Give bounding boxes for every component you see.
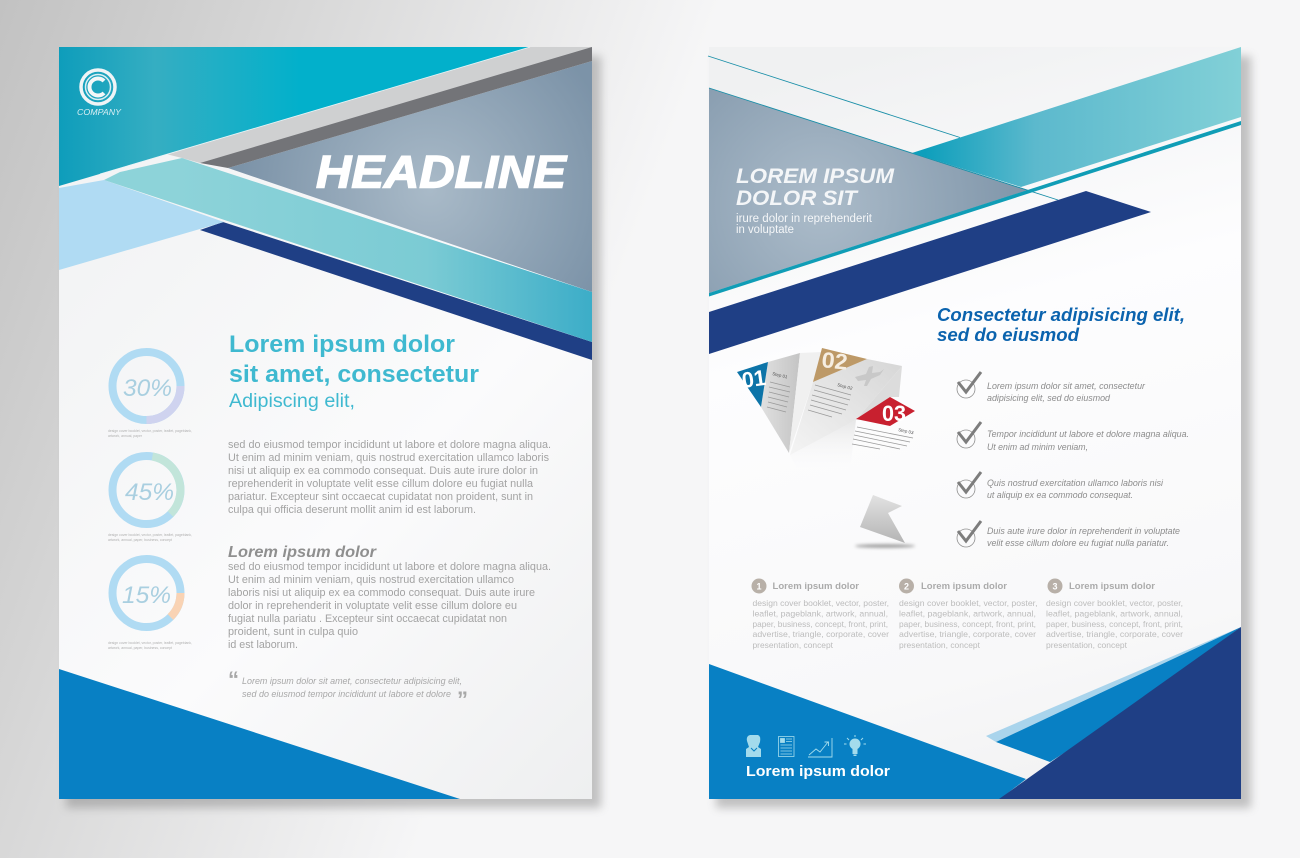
column 3: paper, business, concept, front, print,	[1046, 619, 1183, 629]
heading: lorem ipsum dolor sit: in voluptate	[736, 224, 794, 236]
heading: lorem ipsum dolor	[229, 331, 479, 412]
header shapes	[709, 47, 1241, 354]
step labels	[772, 371, 914, 435]
tail fold	[860, 495, 905, 543]
donut caption 2: design cover booklet, vector, poster, leaflet, pageblank,	[108, 532, 192, 537]
step labels: Step 01	[772, 371, 788, 380]
subheading: Lorem ipsum dolor	[228, 544, 377, 561]
donut caption 3: design cover booklet, vector, poster, leaflet, pageblank,	[108, 640, 192, 645]
footer shapes	[709, 627, 1241, 799]
heading: lorem ipsum dolor: sit amet, consectetur	[229, 361, 479, 388]
tag 02: 02	[820, 347, 849, 375]
quote: sed do eiusmod tempor incididunt ut labore et dolore	[242, 689, 451, 699]
body text 2: laboris nisi ut aliquip ex ea commodo consequat. Duis aute irure	[228, 587, 535, 599]
item 2	[957, 422, 1189, 452]
donut 45%	[112, 456, 180, 524]
panel: left page	[59, 47, 601, 808]
icon: person	[746, 735, 761, 757]
floor shadow	[855, 544, 915, 548]
tag 03: 03	[882, 401, 906, 426]
column 1: leaflet, pageblank, artwork, annual,	[752, 608, 888, 618]
icon: light bulb	[844, 735, 866, 756]
column 2	[899, 578, 1038, 650]
column 1: Lorem ipsum dolor	[772, 580, 859, 591]
column 2: presentation, concept	[899, 640, 981, 650]
tag 01: 01	[740, 365, 767, 393]
headline: HEADLINE	[316, 146, 568, 198]
quote: ”	[457, 687, 468, 712]
item 3: Quis nostrud exercitation ullamco laboris nisi	[987, 478, 1164, 488]
column 3: 3	[1052, 582, 1058, 592]
body text 2: sed do eiusmod tempor incididunt ut labore et dolore magna aliqua.	[228, 561, 551, 573]
step text lines	[767, 382, 913, 449]
tag 03	[856, 397, 915, 426]
icon: document	[778, 736, 794, 756]
item 1: Lorem ipsum dolor sit amet, consectetur	[987, 381, 1146, 391]
body text 1: reprehenderit in voluptate velit esse cillum dolore eu fugiat nulla	[228, 478, 533, 490]
tag 01	[737, 362, 768, 407]
column 1	[752, 578, 889, 650]
body text 2	[228, 561, 551, 651]
item 2: Ut enim ad minim veniam,	[987, 442, 1088, 452]
step labels: Step 02	[837, 382, 853, 391]
column 1: design cover booklet, vector, poster,	[752, 598, 889, 608]
column 1: presentation, concept	[752, 640, 834, 650]
donut 15%: 15%	[122, 582, 171, 609]
column 3: advertise, triangle, corporate, cover	[1046, 629, 1183, 639]
item 2: Tempor incididunt ut labore et dolore magna aliqua.	[987, 429, 1189, 439]
icon: growth chart	[808, 738, 832, 757]
body text 1: sed do eiusmod tempor incididunt ut labore et dolore magna aliqua.	[228, 439, 551, 451]
tag 02	[813, 347, 867, 382]
step labels: Step 03	[898, 427, 914, 435]
footer shape	[59, 669, 460, 799]
body text 2: dolor in reprehenderit in voluptate velit esse cillum dolore eu	[228, 600, 517, 612]
footer label: Lorem ipsum dolor	[746, 763, 890, 780]
item 1: adipisicing elit, sed do eiusmod	[987, 393, 1111, 403]
donut 30%	[112, 352, 180, 420]
body text 2: fugiat nulla pariatu . Excepteur sint occaecat cupidatat non	[228, 613, 507, 625]
origami plane graphic	[737, 347, 915, 548]
column 1: advertise, triangle, corporate, cover	[752, 629, 889, 639]
heading: lorem ipsum dolor sit	[736, 164, 895, 236]
logo: COMPANY	[77, 107, 122, 117]
item 4: velit esse cillum dolore eu fugiat nulla pariatur.	[987, 538, 1169, 548]
column 3: presentation, concept	[1046, 640, 1128, 650]
body text 1: pariatur. Excepteur sint occaecat cupidatat non proident, sunt in	[228, 491, 533, 503]
body text 1: Ut enim ad minim veniam, quis nostrud exercitation ullamco laboris	[228, 452, 549, 464]
donut 45%: 45%	[125, 479, 174, 506]
thin line	[708, 56, 960, 138]
checklist	[957, 372, 1189, 548]
body text 2: Ut enim ad minim veniam, quis nostrud exercitation ullamco	[228, 574, 514, 586]
body text 2: proident, sunt in culpa quio	[228, 626, 358, 638]
quote	[228, 667, 468, 712]
column 3: Lorem ipsum dolor	[1069, 580, 1155, 591]
column 2: leaflet, pageblank, artwork, annual,	[899, 608, 1036, 618]
column 2: paper, business, concept, front, print,	[899, 619, 1036, 629]
heading: lorem ipsum dolor: Lorem ipsum dolor	[229, 331, 455, 358]
donut caption 1	[108, 428, 192, 438]
donut caption 3	[108, 640, 192, 650]
item 1	[957, 372, 1146, 403]
heading: consectetur: Consectetur adipisicing elit,	[937, 305, 1185, 325]
body text 1: nisi ut aliquip ex ea commodo consequat. Duis aute irure dolor in	[228, 465, 538, 477]
quote: “	[228, 667, 239, 692]
donut caption 2: artwork, annual, paper, business, concept	[108, 537, 173, 542]
column 3	[1046, 578, 1183, 650]
donut 30%: 30%	[123, 375, 172, 402]
item 4: Duis aute irure dolor in reprehenderit in voluptate	[987, 526, 1180, 536]
donut 15%	[112, 559, 180, 627]
donut caption 1: design cover booklet, vector, poster, leaflet, pageblank,	[108, 428, 192, 433]
heading: lorem ipsum dolor sit: LOREM IPSUM	[736, 164, 895, 188]
heading: lorem ipsum dolor sit: DOLOR SIT	[736, 186, 859, 210]
body text 2: id est laborum.	[228, 639, 298, 651]
column 2: Lorem ipsum dolor	[921, 580, 1007, 591]
item 3	[957, 472, 1164, 500]
heading: consectetur: sed do eiusmod	[937, 325, 1080, 345]
heading: consectetur	[937, 305, 1185, 345]
item 4	[957, 521, 1180, 548]
column 3: leaflet, pageblank, artwork, annual,	[1046, 608, 1183, 618]
panel: right page	[708, 47, 1251, 808]
header shapes	[59, 47, 592, 360]
column 1: paper, business, concept, front, print,	[752, 619, 888, 629]
column 2: design cover booklet, vector, poster,	[899, 598, 1038, 608]
quote: Lorem ipsum dolor sit amet, consectetur adipisicing elit,	[242, 676, 462, 686]
donut caption 2	[108, 532, 192, 542]
body text 1	[228, 439, 551, 516]
heading: lorem ipsum dolor sit: irure dolor in reprehenderit	[736, 213, 873, 225]
plane silhouette	[855, 366, 884, 386]
column 3: design cover booklet, vector, poster,	[1046, 598, 1183, 608]
body text 1: culpa qui officia deserunt mollit anim id est laborum.	[228, 504, 476, 516]
donut caption 3: artwork, annual, paper, business, concept	[108, 645, 173, 650]
item 3: ut aliquip ex ea commodo consequat.	[987, 490, 1133, 500]
column 2: advertise, triangle, corporate, cover	[899, 629, 1036, 639]
donut caption 1: artwork, annual, paper	[108, 433, 143, 438]
logo	[77, 70, 122, 117]
column 2: 2	[904, 582, 909, 592]
column 1: 1	[756, 582, 762, 592]
heading: lorem ipsum dolor: Adipiscing elit,	[229, 391, 355, 412]
